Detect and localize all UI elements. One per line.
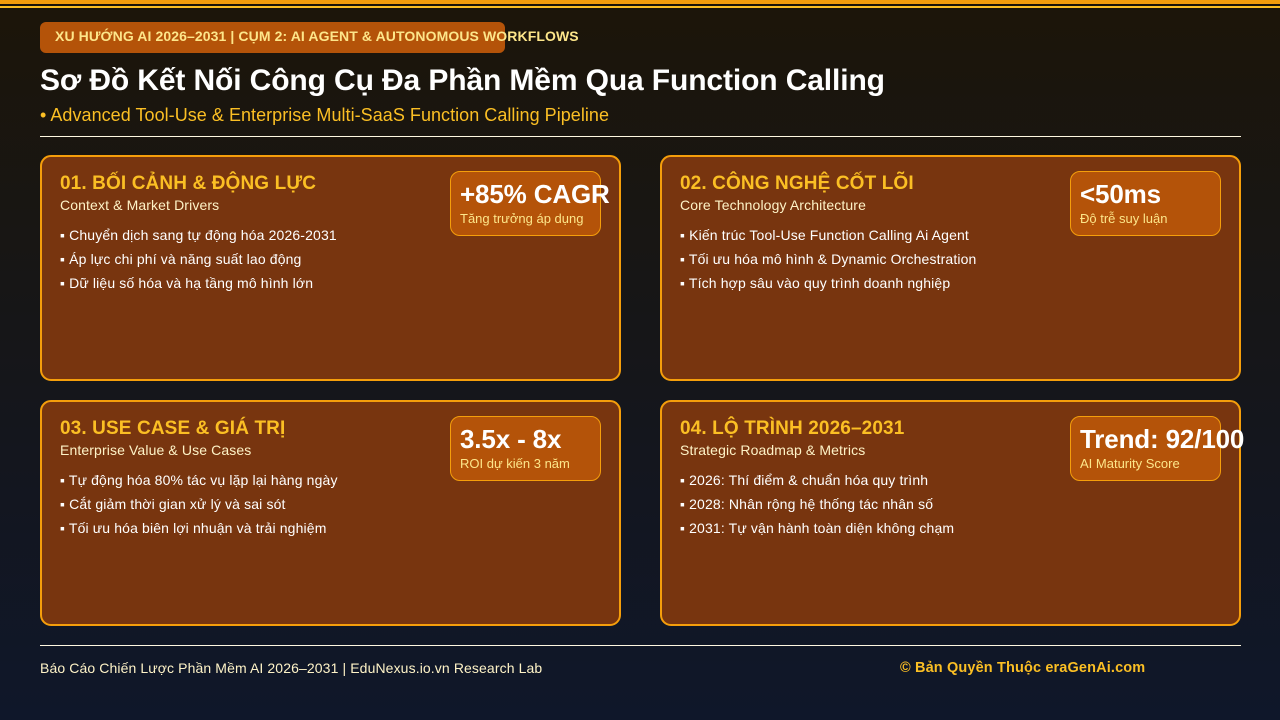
panel 02 subheading: Core Technology Architecture: [680, 197, 866, 213]
panel 02 heading: 02. CÔNG NGHỆ CỐT LÕI: [680, 173, 914, 194]
panel 04 metric badge: AI Maturity Score: [1080, 456, 1180, 471]
panel 04 bullet list: ▪ 2026: Thí điểm & chuẩn hóa quy trình: [680, 472, 928, 488]
panel 01 metric badge: [450, 171, 601, 236]
panel 02 metric badge: <50ms: [1080, 179, 1161, 209]
panel 03 bullet list: ▪ Cắt giảm thời gian xử lý và sai sót: [60, 496, 286, 512]
panel 03 subheading: Enterprise Value & Use Cases: [60, 442, 251, 458]
panel 01 bullet list: ▪ Chuyển dịch sang tự động hóa 2026-2031: [60, 227, 337, 243]
panel 03 bullet list: [60, 472, 338, 536]
panel 04 metric badge: Trend: 92/100: [1080, 424, 1244, 454]
panel 03 metric badge: 3.5x - 8x: [460, 424, 561, 454]
panel 04 heading: 04. LỘ TRÌNH 2026–2031: [680, 418, 904, 439]
category tag: [40, 22, 505, 53]
panel 01 heading: 01. BỐI CẢNH & ĐỘNG LỰC: [60, 173, 316, 194]
panel: 02 core technology: [660, 155, 1241, 381]
panel 01 bullet list: [60, 227, 337, 291]
panel 03 bullet list: ▪ Tự động hóa 80% tác vụ lặp lại hàng ngày: [60, 472, 338, 488]
top accent bar: [0, 0, 1280, 8]
panel 02 metric badge: Độ trễ suy luận: [1080, 211, 1167, 226]
panel 02 bullet list: [680, 227, 976, 291]
panel 02 metric badge: [1070, 171, 1221, 236]
panel: 03 use case: [40, 400, 621, 626]
panel 01 metric badge: Tăng trưởng áp dụng: [460, 211, 583, 226]
panel 04 subheading: Strategic Roadmap & Metrics: [680, 442, 865, 458]
panel 04 bullet list: [680, 472, 954, 536]
panel 04 metric badge: [1070, 416, 1221, 481]
panel 04 bullet list: ▪ 2028: Nhân rộng hệ thống tác nhân số: [680, 496, 933, 512]
panel 01 subheading: Context & Market Drivers: [60, 197, 219, 213]
panel 01 metric badge: +85% CAGR: [460, 179, 610, 209]
panel 01 bullet list: ▪ Áp lực chi phí và năng suất lao động: [60, 251, 301, 267]
panel 03 heading: 03. USE CASE & GIÁ TRỊ: [60, 418, 285, 439]
panel 04 bullet list: ▪ 2031: Tự vận hành toàn diện không chạm: [680, 520, 954, 536]
panel 02 bullet list: ▪ Kiến trúc Tool-Use Function Calling Ai Agent: [680, 227, 969, 243]
footer copyright: © Bản Quyền Thuộc eraGenAi.com: [900, 660, 1145, 676]
panel: 04 roadmap: [660, 400, 1241, 626]
panel 01 bullet list: ▪ Dữ liệu số hóa và hạ tầng mô hình lớn: [60, 275, 313, 291]
subtitle: • Advanced Tool-Use & Enterprise Multi-SaaS Function Calling Pipeline: [40, 105, 609, 125]
panel 03 metric badge: ROI dự kiến 3 năm: [460, 456, 570, 471]
panel 02 bullet list: ▪ Tối ưu hóa mô hình & Dynamic Orchestration: [680, 251, 976, 267]
panel: 01 context: [40, 155, 621, 381]
panel 02 bullet list: ▪ Tích hợp sâu vào quy trình doanh nghiệp: [680, 275, 950, 291]
category tag: XU HƯỚNG AI 2026–2031 | CỤM 2: AI AGENT & AUTONOMOUS WORKFLOWS: [55, 28, 579, 44]
title: Sơ Đồ Kết Nối Công Cụ Đa Phần Mềm Qua Function Calling: [40, 64, 885, 97]
footer source: Báo Cáo Chiến Lược Phần Mềm AI 2026–2031 | EduNexus.io.vn Research Lab: [40, 660, 542, 676]
panel 03 metric badge: [450, 416, 601, 481]
panel 03 bullet list: ▪ Tối ưu hóa biên lợi nhuận và trải nghiệm: [60, 520, 327, 536]
